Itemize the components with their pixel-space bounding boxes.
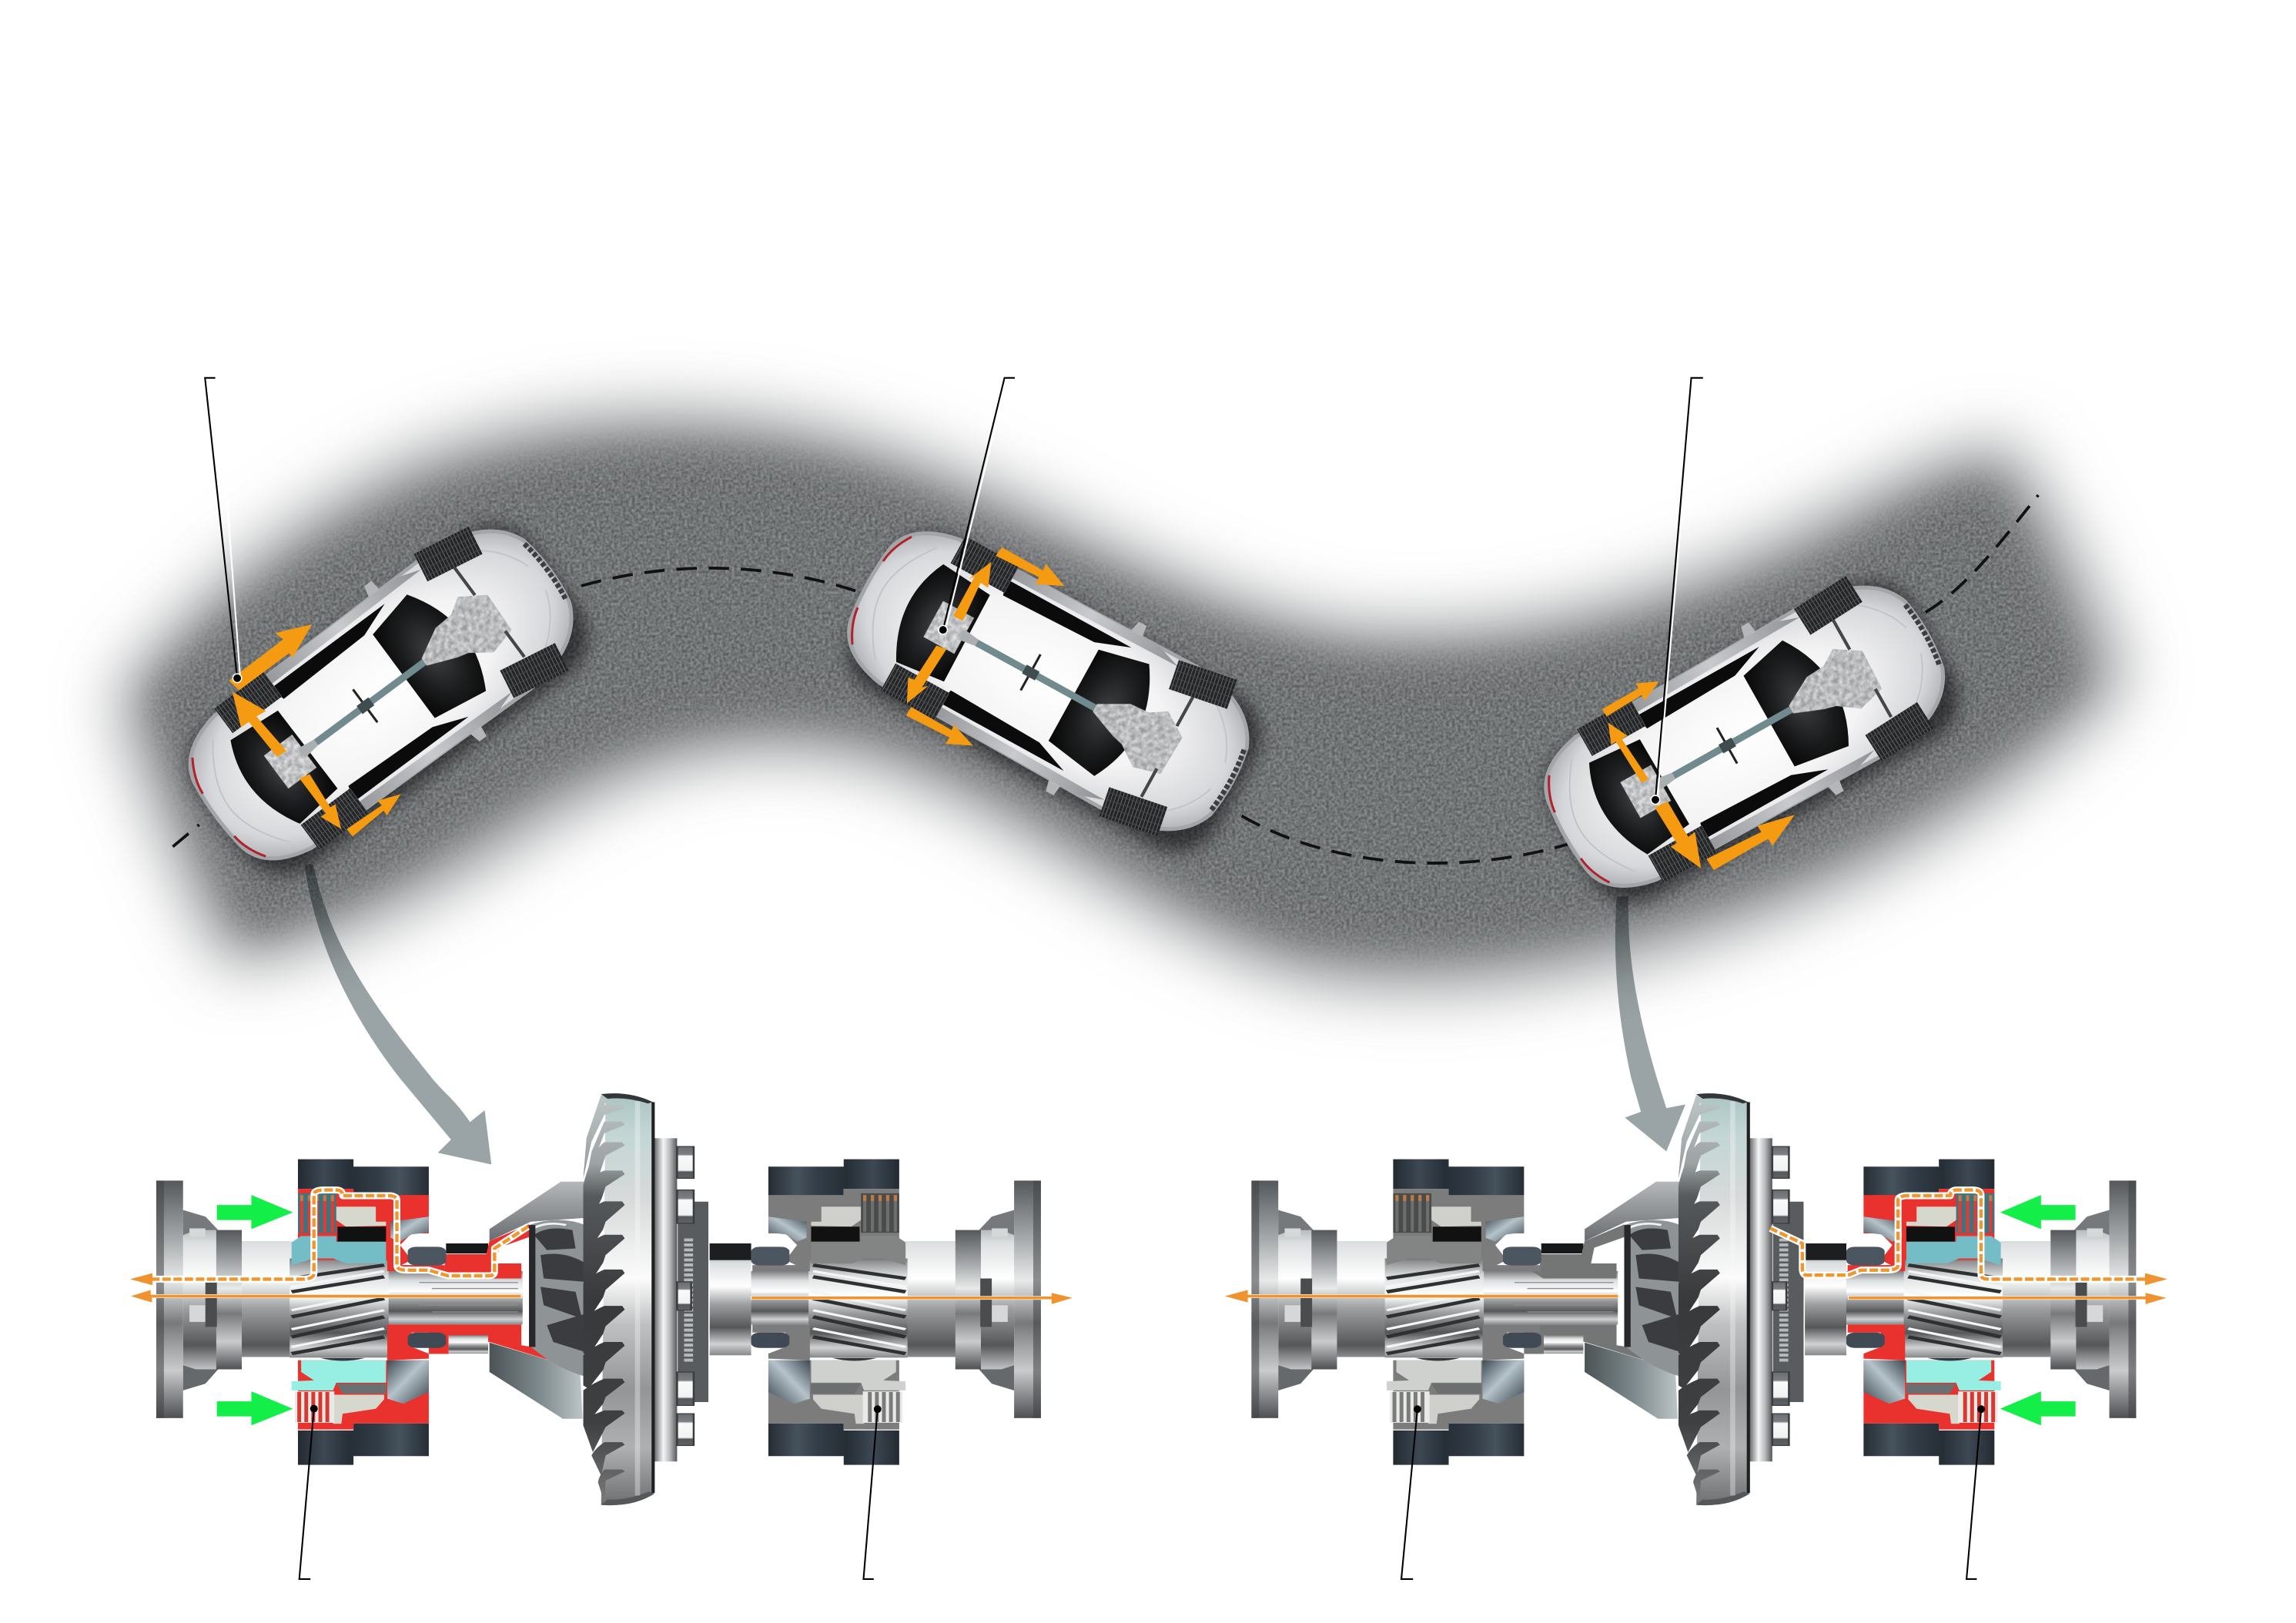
green pressure arrow bottom [2000, 1391, 2076, 1425]
oil pressure path, dashed [1770, 1190, 2145, 1279]
green pressure arrow top [217, 1195, 293, 1229]
green pressure arrow top [2000, 1195, 2076, 1229]
left output flange [1251, 1180, 1387, 1418]
active clutch unit (red) [1846, 1160, 2003, 1465]
car 3 with drivetrain and torque arrows [1518, 549, 1976, 921]
callout: left differential, right clutch [863, 1405, 882, 1579]
car 1 body [159, 491, 607, 894]
orange flow arrow right [1848, 1293, 2167, 1304]
inactive clutch unit (grey) [1385, 1160, 1541, 1465]
car 1 with drivetrain and torque arrows [159, 491, 607, 894]
right output flange [2001, 1180, 2136, 1418]
oil pressure path, dashed [151, 1190, 527, 1279]
orange flow arrow upper left [130, 1273, 152, 1285]
callout: car 1 [205, 378, 242, 683]
car 2 orange torque arrows [906, 547, 1064, 746]
car 3 orange torque arrows [1602, 681, 1795, 870]
car 2 front wheels [1094, 651, 1242, 845]
curved arrow to left differential [305, 864, 491, 1165]
right output flange [905, 1180, 1041, 1418]
oil pressure path and flow arrows [1224, 1190, 2167, 1425]
left differential assembly [130, 1093, 1073, 1505]
orange flow arrow left [130, 1290, 521, 1303]
left output flange [156, 1180, 292, 1418]
car 2 body [822, 498, 1278, 868]
car 1 orange torque arrows [229, 624, 400, 837]
central ring gear and carrier [387, 1093, 810, 1505]
road with asphalt texture [117, 413, 2126, 987]
car 3 front wheels [1792, 575, 1935, 762]
car 2 with drivetrain and torque arrows [822, 498, 1278, 868]
orange flow arrow right [751, 1293, 1073, 1304]
callout: car 3 [1651, 378, 1703, 804]
car 1 shadow [171, 507, 607, 893]
car 1 front wheels [410, 518, 573, 707]
callout: car 2 [939, 378, 1015, 634]
callout: right differential, right clutch [1966, 1405, 1985, 1579]
curved arrow to right differential [1615, 896, 1685, 1151]
car 3 body [1518, 549, 1974, 921]
callout: right differential, left clutch [1401, 1405, 1421, 1579]
central ring gear and carrier [1482, 1093, 1905, 1505]
car 2 shadow [831, 517, 1277, 868]
orange flow arrow upper right [2145, 1273, 2167, 1285]
callout: left differential, left clutch [300, 1405, 318, 1579]
callout lines from clutches [300, 1405, 1985, 1579]
inactive clutch unit (grey) [751, 1160, 908, 1465]
callout lines from cars [205, 378, 1703, 804]
active clutch unit (red) [290, 1160, 446, 1465]
green pressure arrow bottom [217, 1391, 293, 1425]
right differential assembly [1224, 1093, 2167, 1505]
car 3 shadow [1530, 565, 1976, 919]
dashed driving line [172, 495, 2038, 863]
orange flow arrow left [1224, 1290, 1618, 1303]
